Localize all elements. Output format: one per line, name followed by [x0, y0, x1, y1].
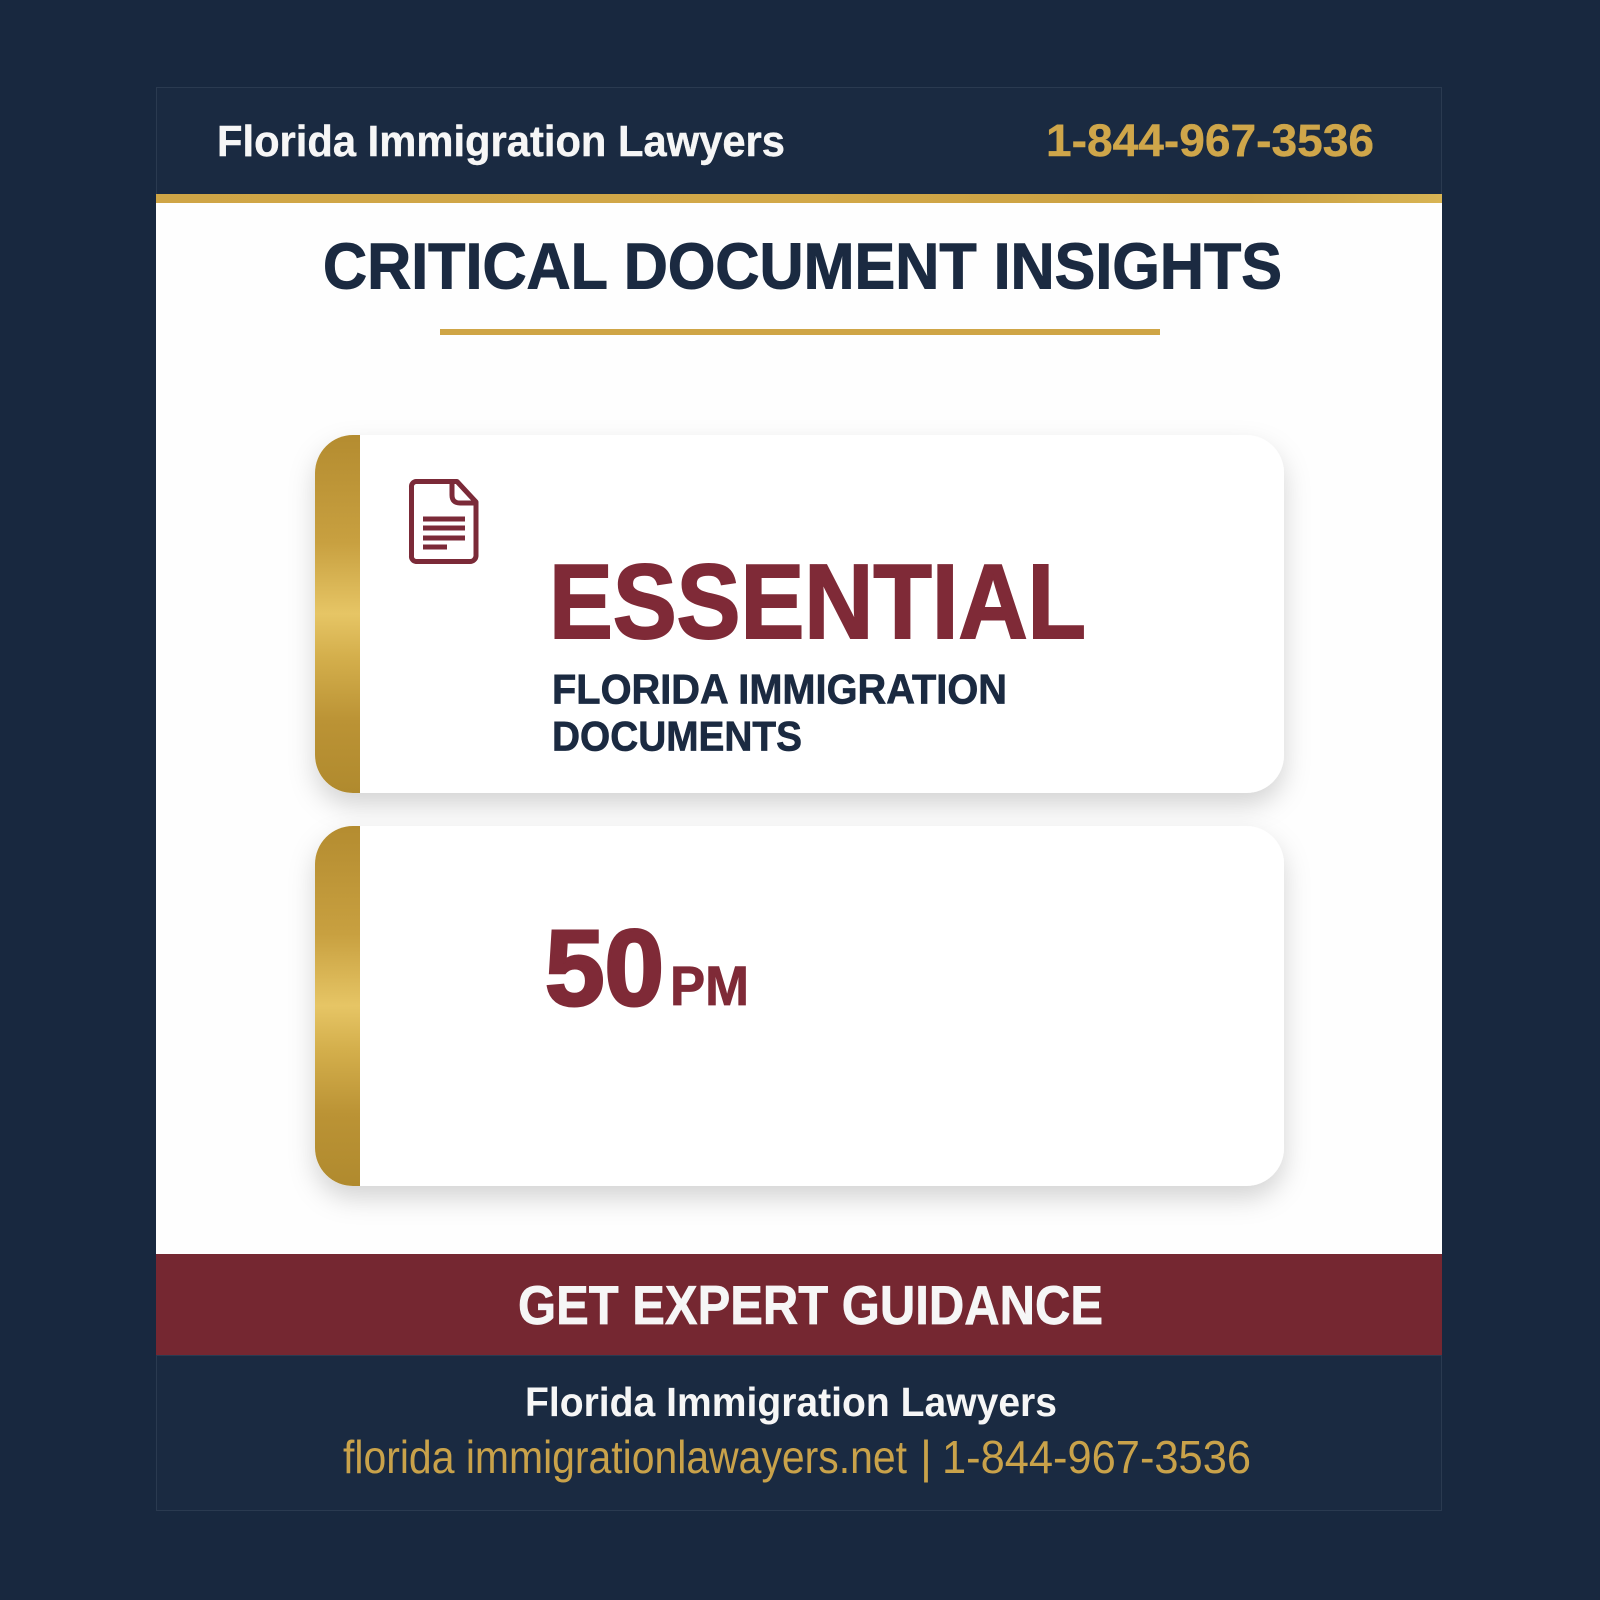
footer website and phone: 1-844-967-3536	[942, 1431, 1251, 1483]
gold header band	[156, 194, 1442, 203]
footer firm name: Florida Immigration Lawyers	[525, 1379, 1057, 1425]
panel: essential documents card	[315, 435, 1284, 793]
footer	[156, 1356, 1442, 1510]
footer website and phone: florida immigrationlawayers.net	[343, 1431, 907, 1483]
call to action text: GET EXPERT GUIDANCE	[518, 1274, 1103, 1336]
PM unit: PM	[670, 954, 749, 1017]
footer website and phone	[343, 1431, 1251, 1483]
gold stripe	[315, 826, 360, 1186]
50 figure: 50	[545, 907, 664, 1028]
title underline	[440, 329, 1160, 335]
header bar	[156, 88, 1442, 194]
header phone number: 1-844-967-3536	[1046, 115, 1374, 166]
title: CRITICAL DOCUMENT INSIGHTS	[323, 230, 1282, 302]
icon: document	[411, 482, 476, 562]
gold stripe	[315, 435, 360, 793]
header firm name: Florida Immigration Lawyers	[217, 117, 785, 166]
footer website and phone: |	[920, 1431, 932, 1483]
subheading line 1: FLORIDA IMMIGRATION	[552, 666, 1007, 712]
call to action band	[156, 1254, 1442, 1355]
subheading line 2: DOCUMENTS	[552, 712, 802, 760]
panel: 50 PM card	[315, 826, 1284, 1186]
essential heading: ESSENTIAL	[549, 543, 1086, 661]
main white panel	[156, 203, 1442, 1254]
